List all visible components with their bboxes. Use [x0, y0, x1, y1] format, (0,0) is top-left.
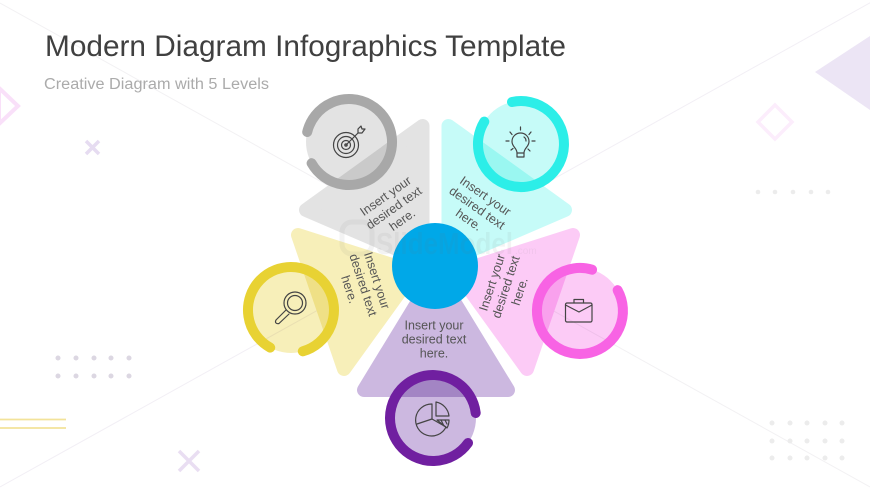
gray text: [355, 172, 433, 244]
cyan ring: [478, 101, 564, 187]
dots top right: [756, 190, 830, 194]
icon: briefcase: [566, 300, 592, 322]
purple text: here.: [420, 346, 448, 360]
yellow text: [333, 248, 394, 323]
yellow circle fill: [248, 267, 334, 353]
panel: cyan level: [438, 101, 565, 260]
pink triangle: [457, 235, 573, 369]
decorative yellow lines: [0, 420, 66, 428]
yellow text: Insert your: [361, 250, 393, 311]
subtitle: Creative Diagram with 5 Levels: [44, 76, 269, 93]
yellow triangle: [298, 235, 414, 369]
pink text: Insert your: [476, 252, 508, 313]
icon: pie chart: [416, 402, 449, 436]
cyan text: desired text: [447, 184, 508, 233]
gray circle fill: [306, 99, 392, 185]
panel: gray level: [306, 99, 433, 260]
dots left: [56, 356, 132, 378]
panel: yellow level: [248, 235, 414, 369]
decorative diamond right: [758, 105, 792, 139]
icon: light bulb: [506, 127, 535, 157]
yellow text: desired text: [346, 252, 380, 318]
watermark: SlideModel: [376, 226, 513, 261]
icon: target: [334, 126, 365, 158]
purple ring: [390, 375, 476, 461]
gray text: desired text: [364, 183, 425, 232]
decorative cross upper left: [86, 141, 99, 154]
purple text: desired text: [402, 332, 467, 346]
gray triangle: [306, 126, 422, 260]
pink ring: [537, 268, 623, 354]
cyan text: [438, 172, 516, 244]
pink circle fill: [537, 268, 623, 354]
purple text: [402, 318, 467, 360]
cyan text: here.: [453, 206, 484, 234]
gray text: here.: [387, 206, 418, 234]
icon: magnifier: [276, 292, 306, 324]
cyan text: Insert your: [457, 173, 514, 219]
panel: pink level: [457, 235, 623, 369]
cyan circle fill: [478, 101, 564, 187]
yellow ring: [248, 267, 334, 351]
pink text: here.: [509, 276, 531, 307]
yellow text: here.: [338, 274, 360, 305]
cyan triangle: [448, 126, 565, 260]
pink text: desired text: [489, 254, 523, 320]
decorative diamond left: [0, 88, 18, 124]
purple text: Insert your: [404, 318, 464, 332]
watermark: .com: [515, 246, 537, 257]
purple circle fill: [390, 375, 476, 461]
title: Modern Diagram Infographics Template: [45, 30, 566, 63]
decorative cross bottom: [179, 451, 199, 471]
pink text: [476, 249, 537, 324]
purple triangle: [364, 272, 508, 390]
gray ring: [307, 99, 392, 185]
dots bottom right: [770, 420, 844, 460]
panel: purple level: [364, 272, 508, 461]
center circle: [392, 223, 478, 309]
gray text: Insert your: [357, 173, 414, 219]
decorative triangle top right: [815, 36, 870, 110]
